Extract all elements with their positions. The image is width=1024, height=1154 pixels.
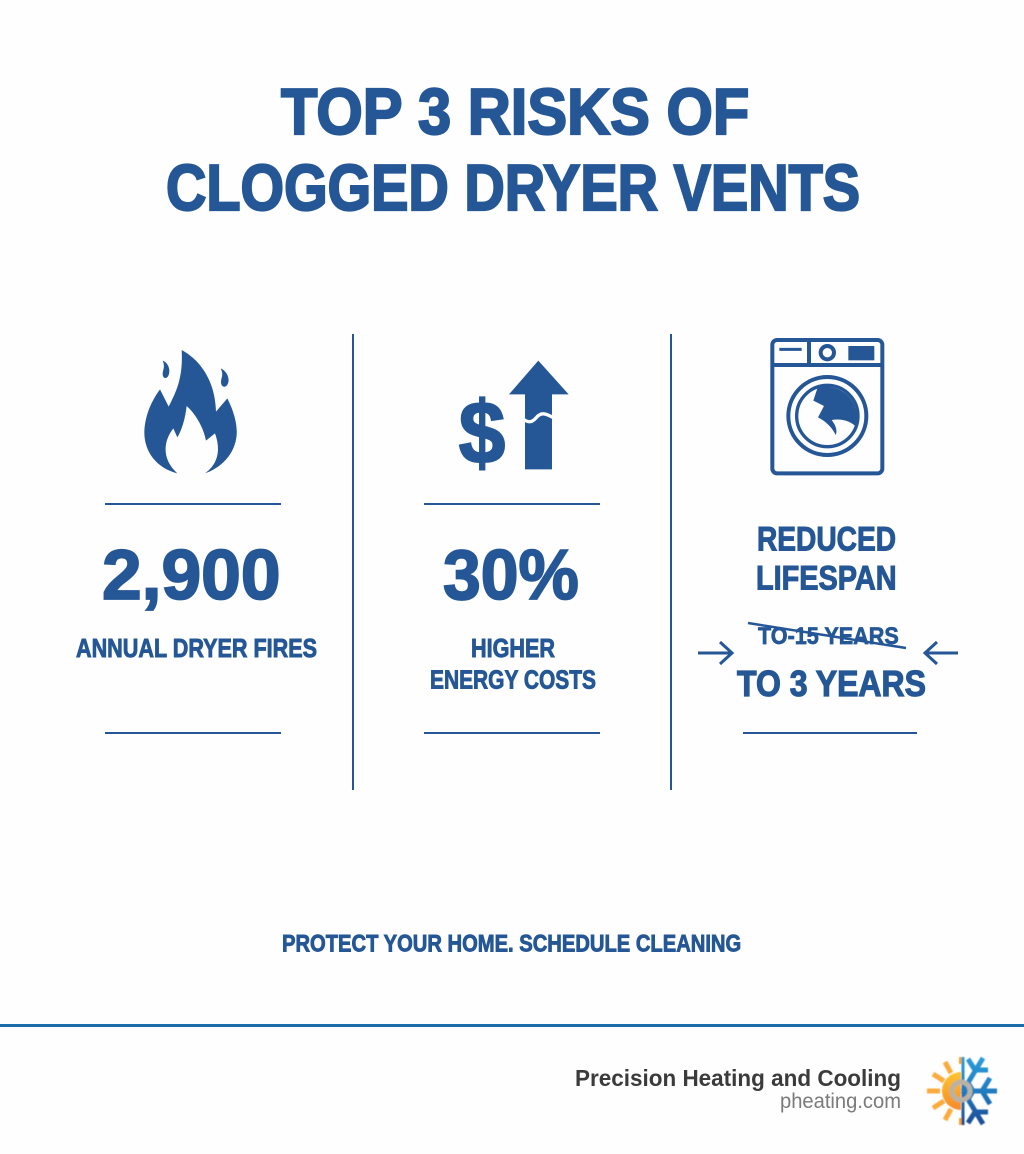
call to action: PROTECT YOUR HOME. SCHEDULE CLEANING — [282, 930, 741, 957]
title: CLOGGED DRYER VENTS — [166, 151, 860, 224]
panel: reduced lifespan — [698, 340, 958, 734]
rule — [743, 732, 917, 734]
heading: reduced lifespan: REDUCED — [757, 520, 896, 558]
icon: sun and snowflake logo — [927, 1057, 997, 1125]
label: higher energy costs — [430, 634, 596, 695]
footer rule — [0, 1024, 1024, 1027]
rule — [424, 732, 600, 734]
title — [166, 77, 860, 224]
heading: reduced lifespan: LIFESPAN — [756, 558, 897, 597]
label: annual dryer fires: ANNUAL DRYER FIRES — [76, 634, 317, 664]
icon: dryer with cracked drum — [772, 340, 882, 473]
panel: dryer fires — [76, 350, 317, 734]
arrow: left pointing — [925, 642, 958, 664]
icon: dollar and rising arrow — [459, 361, 569, 482]
title: TOP 3 RISKS OF — [281, 77, 749, 149]
website: pheating.com — [780, 1090, 901, 1113]
stat: to 3 years: TO 3 YEARS — [737, 664, 926, 704]
heading: reduced lifespan — [756, 520, 897, 597]
stat: 30%: 30% — [443, 536, 579, 614]
rule — [105, 503, 281, 505]
column dividers — [352, 334, 672, 790]
struck-through text: 10-15 years: TO-15 YEARS — [758, 622, 899, 649]
brand name: Precision Heating and Cooling — [575, 1065, 901, 1091]
rule — [424, 503, 600, 505]
stat: 2,900: 2,900 — [102, 536, 281, 614]
rule — [105, 732, 281, 734]
icon: dollar and rising arrow: $ — [459, 384, 505, 482]
icon: flame — [144, 350, 237, 473]
arrow: right pointing — [698, 642, 732, 664]
label: higher energy costs: ENERGY COSTS — [430, 666, 596, 695]
panel: energy costs — [424, 361, 600, 734]
label: higher energy costs: HIGHER — [471, 634, 555, 664]
